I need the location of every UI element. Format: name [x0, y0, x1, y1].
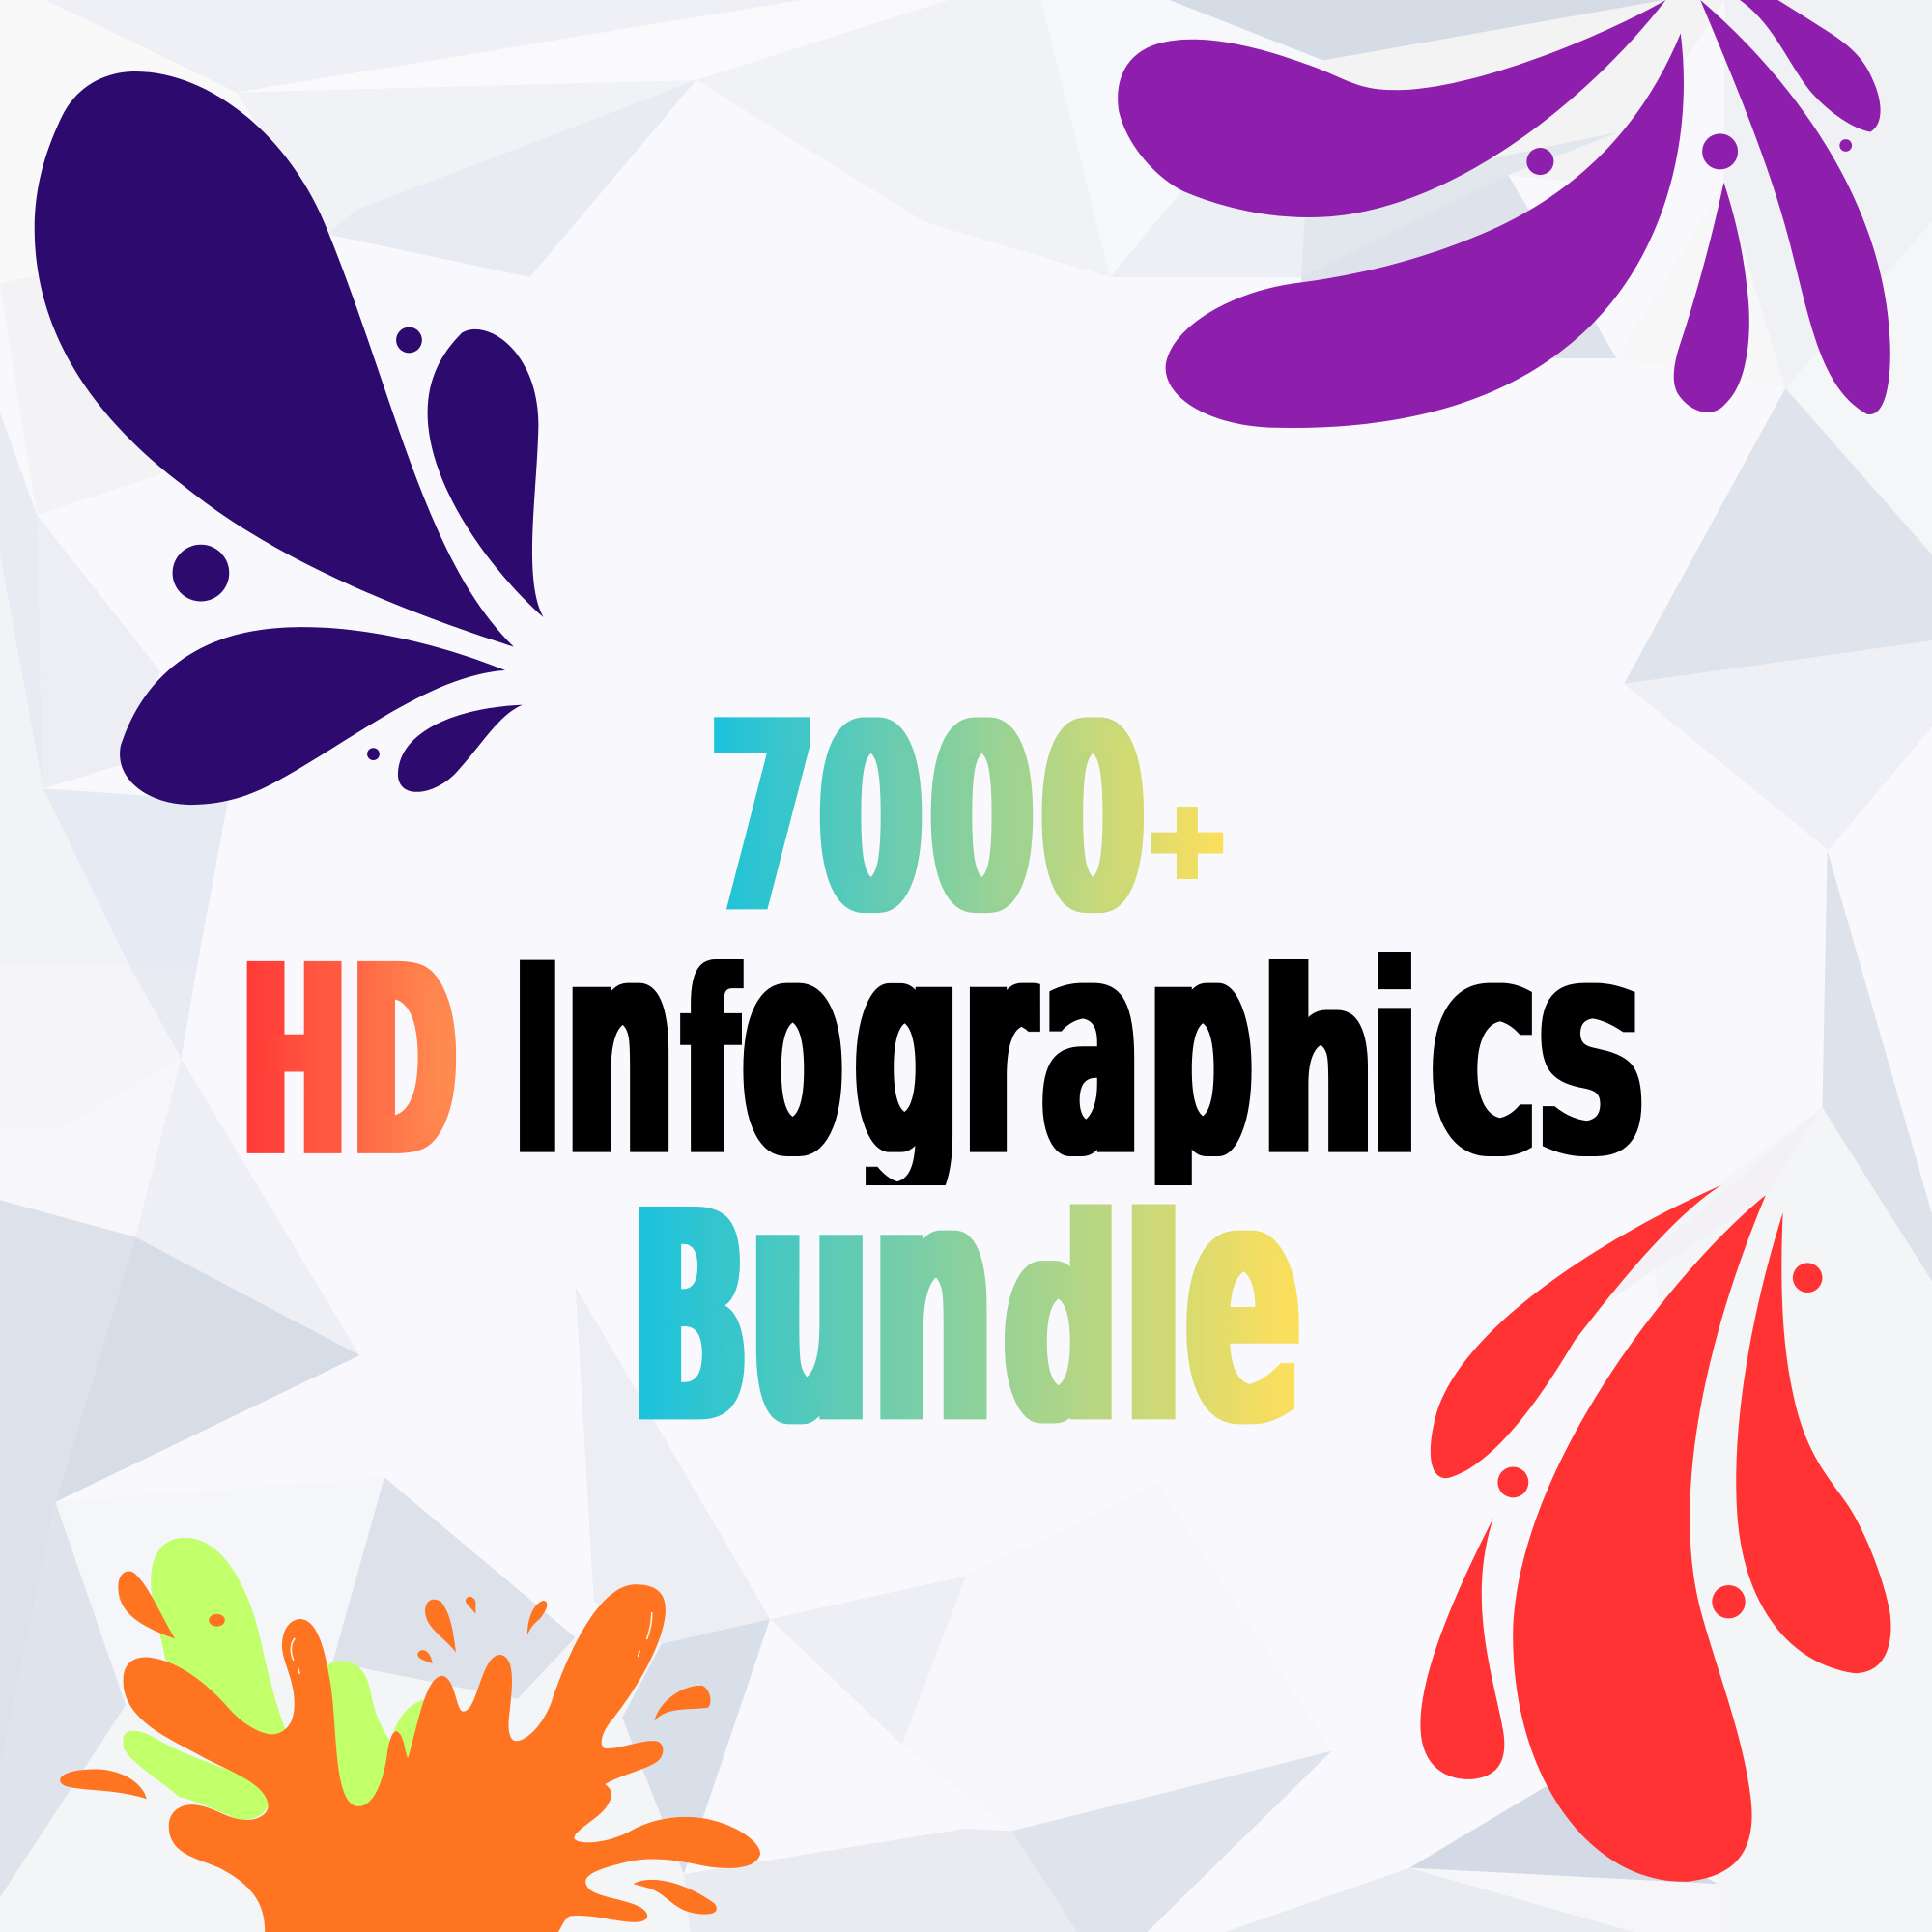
title line 2: HD Infographics: g — [855, 871, 959, 1224]
title line 1: 7000+: 0 — [819, 670, 923, 971]
title line 2: HD Infographics: h — [1262, 917, 1375, 1212]
title line 2: HD Infographics: f — [684, 917, 738, 1212]
title line 2: HD Infographics: c — [1431, 871, 1538, 1224]
title line 3: Bundle: n — [873, 1108, 993, 1500]
splash: purple top-right — [1118, 0, 1890, 428]
title line 2: HD Infographics: p — [1149, 871, 1252, 1224]
title line 1: 7000+: 7 — [711, 666, 815, 972]
splash: navy top-left — [35, 71, 543, 805]
title line 2: HD Infographics: s — [1538, 871, 1644, 1224]
title line 3: Bundle — [632, 1108, 1300, 1500]
title line 3: Bundle: u — [750, 1108, 870, 1500]
title line 1: 7000+ — [711, 666, 1229, 972]
title line 2: HD Infographics — [247, 952, 1642, 1185]
title line 2: HD Infographics: a — [1042, 871, 1140, 1224]
title line 2: HD Infographics: o — [743, 871, 842, 1224]
splash: red bottom-right — [1420, 1185, 1890, 1882]
title line 1: 7000+: 0 — [930, 670, 1034, 971]
title line 2: HD Infographics: r — [963, 871, 1035, 1224]
title line 1: 7000+: + — [1146, 782, 1229, 898]
splash: orange and lime bottom-left — [60, 1538, 760, 1932]
title line 2: HD Infographics: i — [1373, 908, 1416, 1215]
title line 2: HD Infographics: H — [242, 909, 346, 1216]
title line 3: Bundle: d — [1005, 1156, 1119, 1487]
title line 3: Bundle: l — [1124, 1156, 1182, 1487]
title line 2: HD Infographics: I — [514, 908, 561, 1215]
title line 3: Bundle: e — [1186, 1108, 1300, 1500]
title line 1: 7000+: 0 — [1041, 670, 1144, 971]
title line 3: Bundle: B — [632, 1150, 749, 1489]
title line 2: HD Infographics: D — [354, 909, 455, 1216]
title line 2: HD Infographics: n — [565, 871, 675, 1224]
